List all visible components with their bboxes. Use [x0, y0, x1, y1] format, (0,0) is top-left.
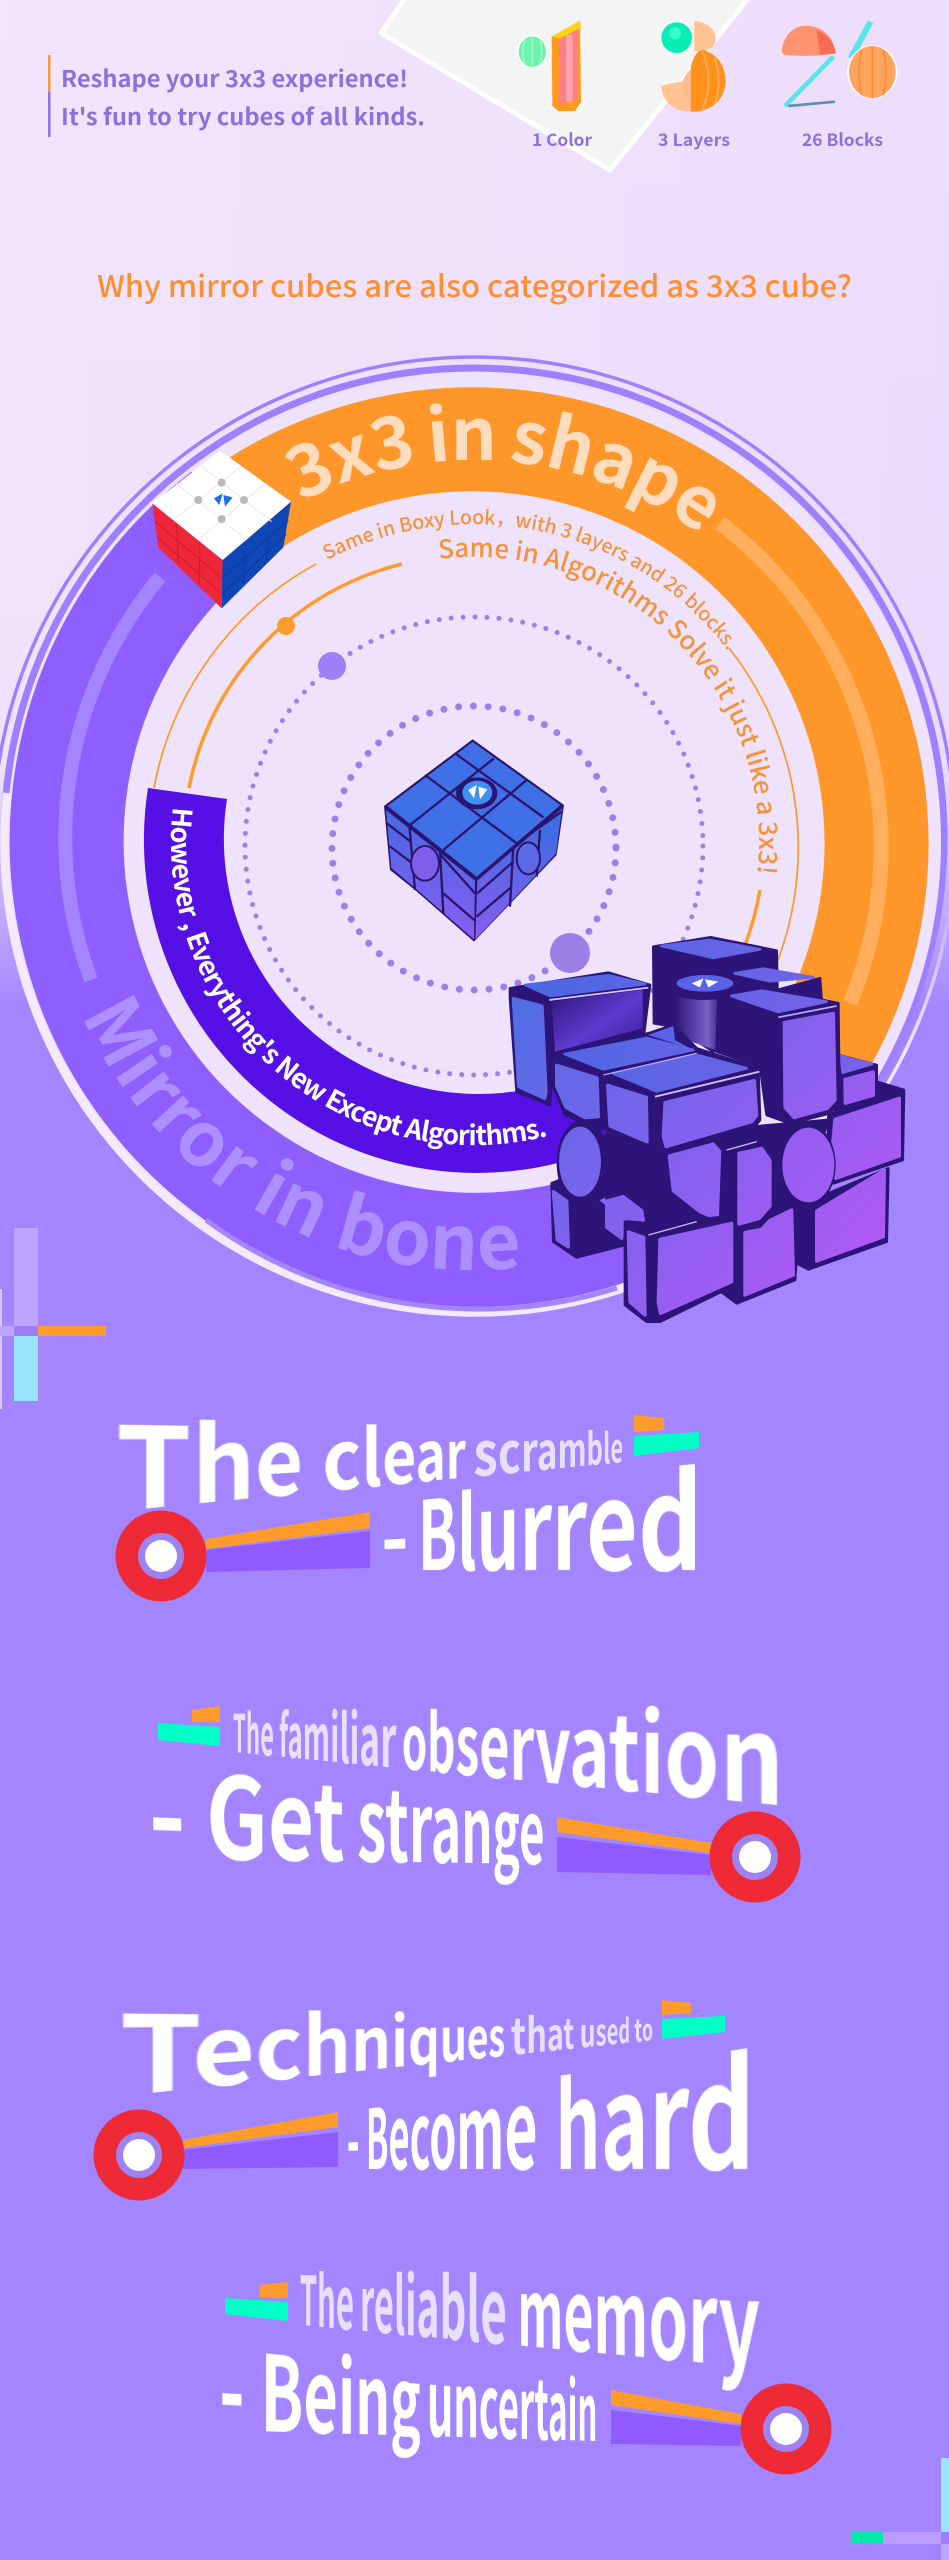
dotted orbit inner [332, 706, 616, 990]
icon: 26 blocks numeral [782, 20, 898, 108]
heading line: the reliable memory: memory [382, 1276, 434, 1753]
orange dot [277, 617, 295, 635]
block: The reliable memory - Being uncertain [219, 1276, 832, 2560]
top face [386, 741, 562, 878]
purple band lower highlight [206, 1220, 617, 1309]
icon: target with wedges [225, 2282, 832, 2474]
thin orange arc left [154, 564, 316, 788]
heading line: being uncertain [219, 2301, 617, 2560]
heading line: become hard: hard [374, 1019, 386, 1483]
icon: target with wedges [94, 2000, 725, 2200]
heading line: the clear scramble: scramble [473, 1405, 628, 1495]
heading line: techniques that used to: Techniques [119, 1960, 949, 2560]
heading line: get strange [148, 1714, 768, 2560]
icon: target with wedges [158, 1706, 800, 1902]
white angled card [378, 0, 750, 172]
decor: bottom right colour bars [851, 2458, 949, 2560]
heading line: the clear scramble: clear [440, 1902, 861, 2560]
heading line: the clear scramble [115, 1367, 861, 2560]
front bottom piece [625, 1215, 735, 1322]
lower core [607, 1120, 828, 1303]
stat labels: 3 Layers [658, 126, 730, 151]
dotted orbit outer [245, 617, 703, 1075]
left disc [593, 1133, 670, 1203]
heading line: the reliable memory: reliable [328, 1677, 379, 2147]
heading line: being uncertain: Being [268, 2381, 496, 2560]
heading question: Why mirror cubes are also categorized as 3x3 cube? [97, 262, 852, 306]
icon: exploded mirror cube [508, 936, 906, 1323]
thick orange arc left [189, 564, 402, 788]
icon: 3 layers numeral [661, 21, 726, 112]
intro text block: Reshape your 3x3 experience! [61, 60, 408, 94]
heading line: get strange: - [148, 1714, 191, 1943]
heading line: being uncertain: uncertain [427, 2330, 617, 2464]
orange band highlight [720, 523, 881, 1003]
heading line: blurred [383, 948, 695, 1604]
intro text block: It's fun to try cubes of all kinds. [61, 98, 425, 132]
circular diagram [0, 355, 949, 1317]
center cylinder [675, 992, 722, 1052]
stat labels [532, 126, 883, 151]
label: however everything's new: However , Everything's New Except Algorithms. [170, 809, 546, 1150]
icon: 1 color numeral [517, 20, 581, 111]
block: The clear scramble - Blurred [115, 948, 861, 2560]
heading line: become hard: Become [351, 1412, 372, 2105]
right tall piece [717, 988, 839, 1123]
heading line: the reliable memory [300, 1276, 760, 2391]
heading line: techniques that used to [119, 1960, 949, 2560]
label: same in algorithms: Same in Algorithms Solve it just like a 3x3! [440, 538, 778, 872]
heading line: get strange: Get [214, 1797, 402, 2207]
heading line: the familiar observation [233, 693, 778, 1806]
label: 3x3 in shape: 3x3 in shape [284, 403, 716, 530]
icon: stickerless 3x3 cube [152, 450, 291, 608]
heading line: techniques that used to: used [580, 2001, 642, 2059]
heading line: being uncertain: - [219, 2301, 249, 2508]
thin orange arc right [729, 648, 798, 960]
label: mirror in bone: Mirror in bone [84, 995, 518, 1270]
purple orbit dot lower [550, 933, 590, 973]
icon: small mirror cube [384, 739, 564, 942]
block: Techniques that used to - Become hard [94, 1019, 949, 2560]
heading line: techniques that used to: to [634, 2005, 654, 2051]
heading line: the familiar observation: familiar [250, 1189, 281, 1589]
heading line: get strange: strange [421, 2056, 768, 2560]
outer thick ring [4, 368, 944, 1095]
stat labels: 26 Blocks [802, 126, 883, 151]
purple orbit dot upper [318, 652, 346, 680]
heading line: become hard [348, 1019, 748, 2198]
purple band [67, 517, 679, 1250]
thick orange arc right [745, 890, 760, 945]
heading line: the familiar observation: The [233, 1531, 248, 1768]
heading line: the reliable memory: The [300, 2068, 326, 2351]
middle pieces [553, 1025, 760, 1155]
heading line: the clear scramble: The [115, 1367, 400, 2005]
orange band [229, 439, 877, 1084]
intro text block [48, 55, 425, 137]
stat labels: 1 Color [532, 126, 593, 151]
purple band highlight [65, 577, 160, 980]
block: The familiar observation - Get strange [148, 693, 800, 2560]
heading line: blurred: Blurred [397, 948, 471, 1518]
icon: target with wedges [116, 1415, 699, 1602]
back pieces [510, 937, 904, 1269]
light disc [7, 375, 941, 1309]
heading line: techniques that used to: that [511, 1996, 596, 2070]
heading line: become hard: - [348, 2023, 350, 2198]
outer thin ring [0, 357, 949, 1095]
indigo band [144, 788, 644, 1173]
heading line: blurred: - [383, 1407, 394, 1604]
label: same in boxy look: Same in Boxy Look，with 3 layers and 26 blocks. [323, 508, 732, 650]
white lower ring [4, 793, 700, 1313]
center piece [669, 1144, 722, 1221]
decor: left colour bars [0, 1228, 106, 1409]
right disc [774, 1122, 836, 1208]
